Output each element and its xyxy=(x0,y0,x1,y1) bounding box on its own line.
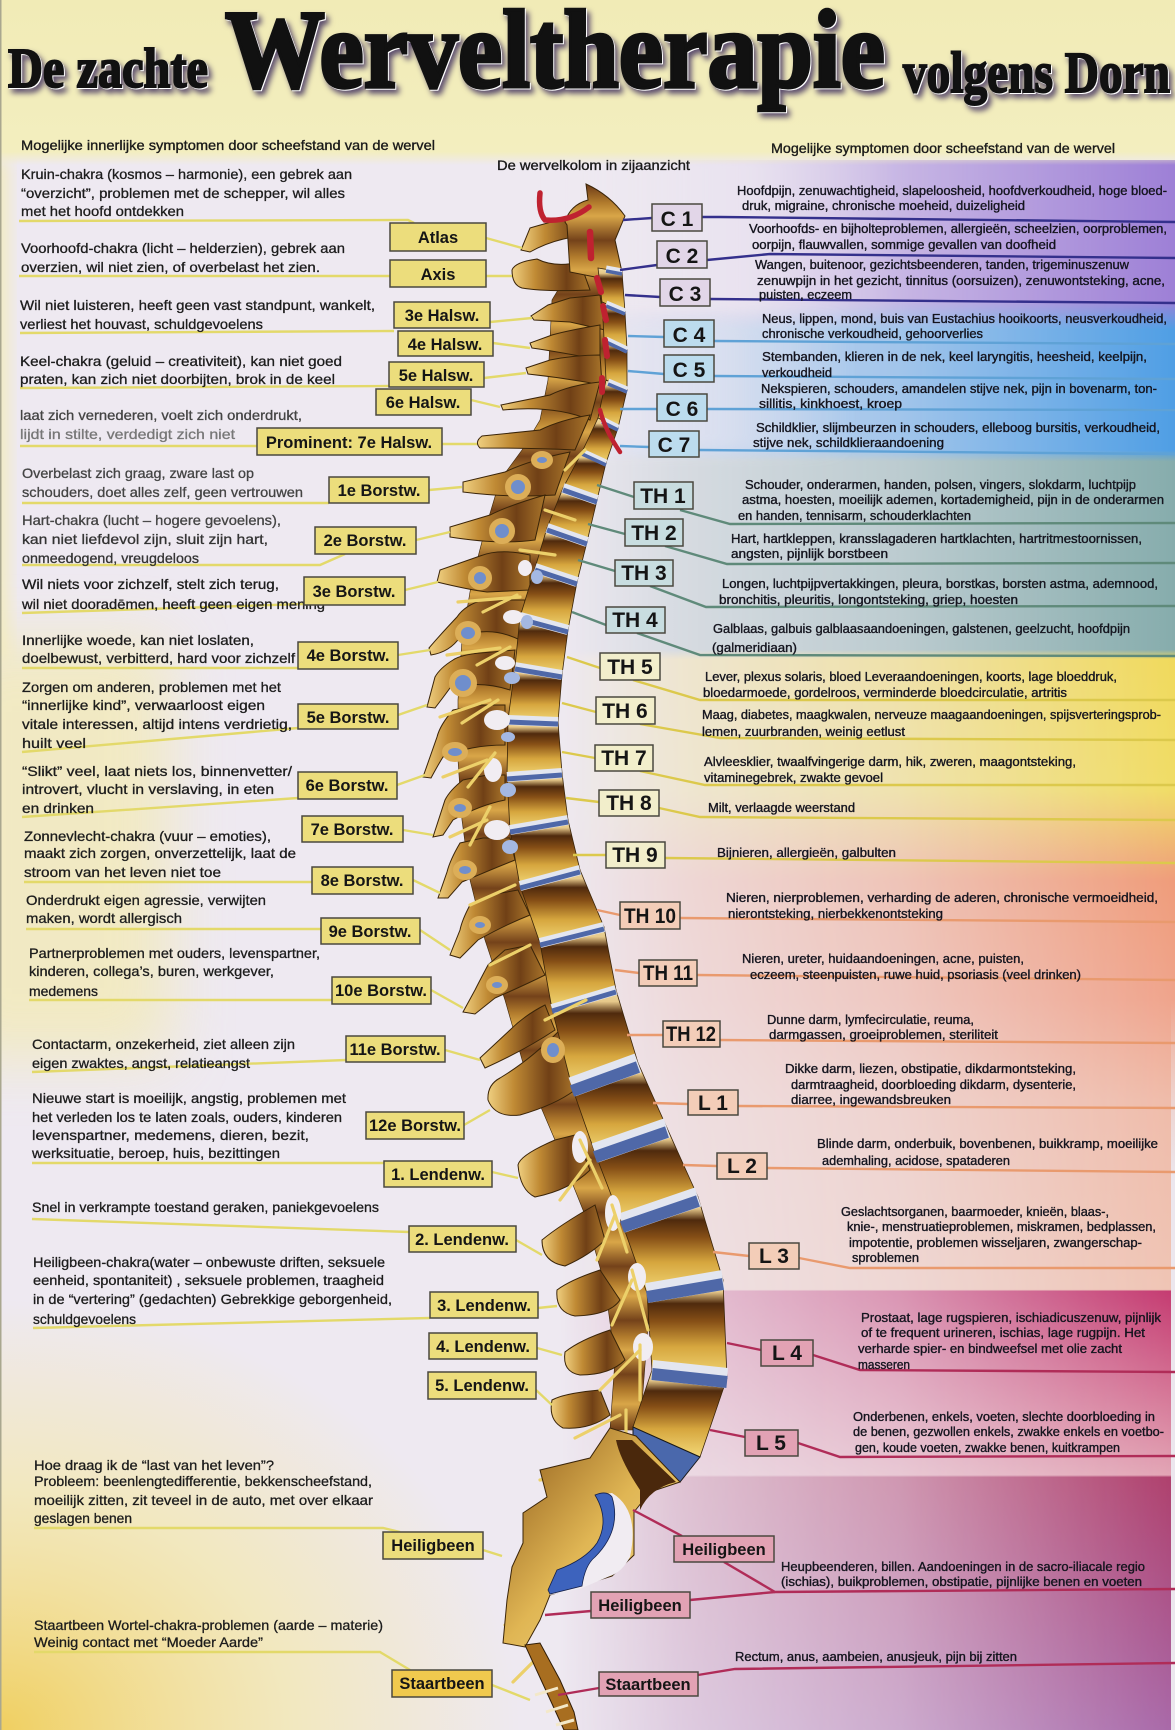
label: 5. Lendenw.: 5. Lendenw. xyxy=(435,1377,529,1395)
text: TH12 xyxy=(767,1013,999,1042)
label: 4. Lendenw. xyxy=(429,1333,537,1359)
text: 3e Borstw xyxy=(21,576,325,612)
text: C2: Voorhoofds- en bijholteproblemen, allergieën, scheelzien, oorproblemen, xyxy=(749,222,1167,236)
label: C 2 xyxy=(657,241,707,268)
label: L 4 xyxy=(761,1340,813,1366)
text: C5: verkoudheid xyxy=(762,366,832,380)
text: 3e Halsw: Wil niet luisteren, heeft geen vast standpunt, wankelt, xyxy=(20,297,375,313)
label: TH 6 xyxy=(596,697,655,724)
left column heading: Mogelijke innerlijke symptomen door scheefstand van de wervel xyxy=(21,137,435,153)
text: Atlas: Kruin-chakra (kosmos – harmonie), een gebrek aan xyxy=(21,166,352,182)
text: 3. Lendenw: eenheid, spontaniteit) , seksuele problemen, traagheid xyxy=(33,1272,384,1288)
text: L4: of te frequent urineren, ischias, lage rugpijn. Het xyxy=(861,1326,1146,1340)
right symptom texts xyxy=(702,184,1167,1664)
label: C 1: C 1 xyxy=(661,208,694,231)
label: 4e Halsw.: 4e Halsw. xyxy=(408,336,482,354)
label: TH 4 xyxy=(606,607,665,633)
label: L 1: L 1 xyxy=(698,1092,728,1115)
text: C3: Wangen, buitenoor, gezichtsbeenderen, tanden, trigeminuszenuw xyxy=(755,258,1130,272)
text: 1. Lendenw: het verleden los te laten zoals, ouders, kinderen xyxy=(32,1109,342,1125)
text: 1. Lendenw: levenspartner, medemens, dieren, bezit, xyxy=(32,1127,309,1143)
text: L2 xyxy=(817,1137,1158,1168)
label: C 6: C 6 xyxy=(666,398,698,421)
text: 3. Lendenw: schuldgevoelens xyxy=(33,1311,136,1327)
label: TH 5: TH 5 xyxy=(607,656,653,679)
spinous processes xyxy=(423,212,625,1428)
text: TH2 xyxy=(731,532,1142,561)
text: 8e Borstw: maakt zich zorgen, onverzettelijk, laat de xyxy=(24,845,296,861)
text: Axis: Voorhoofd-chakra (licht – helderzien), gebrek aan xyxy=(21,240,345,256)
text: TH1: astma, hoesten, moeilijk ademen, kortademigheid, pijn in de onderarmen xyxy=(742,493,1164,507)
text: TH5: bloedarmoede, gordelroos, verminderde bloedcirculatie, artritis xyxy=(703,686,1067,700)
text: 3e Halsw xyxy=(20,297,375,332)
text: 2e Borstw: Hart-chakra (lucht – hogere gevoelens), xyxy=(22,512,281,528)
label: TH 7: TH 7 xyxy=(601,747,647,770)
text: TH3 xyxy=(719,577,1158,607)
spinal nerves xyxy=(440,450,648,1682)
text: TH1: en handen, tennisarm, schouderklachten xyxy=(738,509,971,523)
label: TH 9 xyxy=(606,842,665,868)
text: C3 xyxy=(755,258,1165,302)
text: TH4 xyxy=(712,622,1130,655)
label: C 2: C 2 xyxy=(666,245,698,268)
label: 2e Borstw. xyxy=(315,527,416,554)
text: TH9: Bijnieren, allergieën, galbulten xyxy=(717,846,896,860)
text: L1: Dikke darm, liezen, obstipatie, dikdarmontsteking, xyxy=(785,1062,1076,1076)
intervertebral discs xyxy=(507,269,727,1482)
label: TH 3 xyxy=(615,560,673,586)
text: Staartbeen xyxy=(34,1617,383,1650)
text: 2e Borstw: kan niet liefdevol zijn, sluit zijn hart, xyxy=(22,531,268,547)
text: 8e Borstw: Zonnevlecht-chakra (vuur – emoties), xyxy=(24,828,271,844)
text: TH11: Nieren, ureter, huidaandoeningen, acne, puisten, xyxy=(742,952,1024,966)
text: C4 xyxy=(762,312,1167,341)
text: 5e Borstw xyxy=(22,679,292,751)
text: 3. Lendenw xyxy=(33,1254,392,1327)
text: 6e Borstw: introvert, vlucht in verslaving, in eten xyxy=(22,781,274,797)
label: C 7 xyxy=(649,431,699,457)
left vertebra labels xyxy=(257,223,538,1697)
text: L1 xyxy=(785,1062,1076,1107)
text: Heiligbeen xyxy=(34,1457,373,1526)
label: 2e Borstw.: 2e Borstw. xyxy=(324,532,406,550)
label: TH 3: TH 3 xyxy=(621,562,667,585)
blue facets on thoracic vertebrae xyxy=(445,454,562,1060)
text: L5: de benen, gezwollen enkels, zwakke enkels en voetbo- xyxy=(853,1425,1164,1439)
text: L2: Blinde darm, onderbuik, bovenbenen, buikkramp, moeilijke xyxy=(817,1137,1158,1151)
label: C 5 xyxy=(664,355,714,382)
text: 5e Halsw xyxy=(20,353,342,387)
label: Staartbeen: Staartbeen xyxy=(399,1675,485,1693)
text: TH5 xyxy=(703,670,1117,700)
label: TH 4: TH 4 xyxy=(612,609,658,632)
text: L2: ademhaling, acidose, spataderen xyxy=(822,1154,1010,1168)
text: Staartbeen: Rectum, anus, aambeien, anusjeuk, pijn bij zitten xyxy=(735,1650,1017,1664)
text: TH11: eczeem, steenpuisten, ruwe huid, psoriasis (veel drinken) xyxy=(750,968,1081,982)
label: Staartbeen xyxy=(599,1672,698,1696)
text: 7e Halsw xyxy=(20,407,302,442)
label: 3e Halsw. xyxy=(394,302,490,328)
label: C 3 xyxy=(660,279,710,306)
label: L 5: L 5 xyxy=(756,1432,786,1455)
text: 7e Halsw: laat zich vernederen, voelt zich onderdrukt, xyxy=(20,407,302,423)
text: TH10: nierontsteking, nierbekkenontsteking xyxy=(728,907,943,921)
label: 1. Lendenw.: 1. Lendenw. xyxy=(391,1166,485,1184)
label: L 3 xyxy=(749,1243,799,1269)
text: L4 xyxy=(858,1311,1162,1372)
text: Atlas: “overzicht”, problemen met de schepper, wil alles xyxy=(21,185,345,201)
text: 10e Borstw xyxy=(29,945,320,999)
text: C6: sillitis, kinkhoest, kroep xyxy=(759,397,902,411)
label: TH 1 xyxy=(634,482,693,509)
label: 3e Borstw. xyxy=(304,577,405,605)
right column heading: Mogelijke symptomen door scheefstand van de wervel xyxy=(771,140,1115,156)
centre heading: De wervelkolom in zijaanzicht xyxy=(497,157,690,173)
text: 6e Borstw: en drinken xyxy=(22,800,94,816)
text: C7 xyxy=(753,421,1160,450)
label: 5e Halsw.: 5e Halsw. xyxy=(399,367,473,385)
label: C 3: C 3 xyxy=(669,283,701,306)
text: L5: gen, koude voeten, zwakke benen, kuitkrampen xyxy=(855,1441,1120,1455)
text: C2: oorpijn, flauwvallen, sommige gevallen van doofheid xyxy=(752,238,1056,252)
label: 3. Lendenw. xyxy=(430,1292,538,1318)
label: Prominent: Prominent: 7e Halsw. xyxy=(266,434,432,452)
text: 5e Borstw: vitale interessen, altijd intens verdrietig, xyxy=(22,716,292,732)
text: 5e Halsw: Keel-chakra (geluid – creativiteit), kan niet goed xyxy=(20,353,342,369)
text: C4: chronische verkoudheid, gehoorverlies xyxy=(762,327,983,341)
label: TH 6: TH 6 xyxy=(602,700,648,723)
label: C 4: C 4 xyxy=(673,324,706,347)
text: Heiligbeen: (ischias), buikproblemen, obstipatie, pijnlijke benen en voeten xyxy=(781,1575,1142,1589)
label: TH 10: TH 10 xyxy=(624,905,676,928)
label: 5. Lendenw. xyxy=(428,1372,536,1399)
text: TH6 xyxy=(702,708,1161,739)
label: L 1 xyxy=(688,1090,738,1115)
text: TH4: (galmeridiaan) xyxy=(712,641,797,655)
text: TH7: vitaminegebrek, zwakte gevoel xyxy=(704,771,883,785)
label: 10e Borstw. xyxy=(332,977,431,1004)
text: Staartbeen: Weinig contact met “Moeder Aarde” xyxy=(34,1634,263,1650)
text: Atlas: met het hoofd ontdekken xyxy=(21,203,184,219)
text: Heiligbeen: Heupbeenderen, billen. Aandoeningen in de sacro-iliacale regio xyxy=(781,1560,1145,1574)
text: L3 xyxy=(841,1205,1156,1265)
text: 9e Borstw xyxy=(26,892,266,926)
label: L 4: L 4 xyxy=(772,1342,802,1365)
label: 11e Borstw.: 11e Borstw. xyxy=(349,1041,441,1059)
text: 3. Lendenw: in de “vertering” (gedachten) Gebrekkige geborgenheid, xyxy=(33,1291,392,1307)
label: Heiligbeen: Heiligbeen xyxy=(391,1537,475,1555)
text: 10e Borstw: Partnerproblemen met ouders, levenspartner, xyxy=(29,945,320,961)
text: 3. Lendenw: Heiligbeen-chakra(water – onbewuste driften, seksuele xyxy=(33,1254,385,1270)
text: L1: darmtraagheid, doorbloeding dikdarm, dysenterie, xyxy=(791,1078,1076,1092)
label: 7e Borstw. xyxy=(302,816,403,842)
text: L3: Geslachtsorganen, baarmoeder, knieën, blaas-, xyxy=(841,1205,1109,1219)
text: 1. Lendenw: Nieuwe start is moeilijk, angstig, problemen met xyxy=(32,1090,346,1106)
label: 1e Borstw.: 1e Borstw. xyxy=(338,482,420,500)
text: 1. Lendenw xyxy=(31,1090,346,1161)
label: 1. Lendenw. xyxy=(384,1161,492,1187)
text: 10e Borstw: medemens xyxy=(29,983,98,999)
atlas and axis head xyxy=(565,184,625,278)
text: 7e Halsw: lijdt in stilte, verdedigt zich niet xyxy=(20,426,235,442)
small rib facets xyxy=(500,570,543,854)
label: 6e Halsw. xyxy=(376,389,471,415)
text: Heiligbeen xyxy=(781,1560,1145,1589)
text: 8e Borstw: stroom van het leven niet toe xyxy=(24,864,221,880)
neural arch mass behind the vertebrae xyxy=(458,220,650,1430)
text: C4: Neus, lippen, mond, buis van Eustachius hooikoorts, neusverkoudheid, xyxy=(762,312,1167,326)
text: TH6: lemen, zuurbranden, weinig eetlust xyxy=(702,725,906,739)
label: L 2: L 2 xyxy=(727,1155,757,1178)
label: 2. Lendenw.: 2. Lendenw. xyxy=(415,1231,509,1249)
label: C 1 xyxy=(652,204,702,231)
label: 5e Borstw.: 5e Borstw. xyxy=(307,709,389,727)
coccyx xyxy=(525,1643,578,1730)
label: Staartbeen xyxy=(392,1670,492,1697)
text: TH8: Milt, verlaagde weerstand xyxy=(708,801,855,815)
label: Heiligbeen lower: Heiligbeen xyxy=(598,1597,682,1615)
text: L3: sproblemen xyxy=(852,1251,919,1265)
label: Heiligbeen xyxy=(383,1532,483,1559)
text: C1 xyxy=(737,184,1167,213)
text: 3e Halsw: verliest het houvast, schuldgevoelens xyxy=(20,316,263,332)
label: TH 9: TH 9 xyxy=(612,844,658,867)
text: C3: zenuwpijn in het gezicht, tinnitus (oorsuizen), zenuwontsteking, acne, xyxy=(757,274,1165,288)
label: 9e Borstw. xyxy=(321,918,420,944)
text: 1e Borstw: Overbelast zich graag, zware last op xyxy=(22,465,254,481)
right vertebra labels xyxy=(591,204,813,1696)
label: 5e Halsw. xyxy=(389,362,484,387)
label: 12e Borstw. xyxy=(366,1112,464,1139)
label: 3e Borstw.: 3e Borstw. xyxy=(313,583,395,601)
label: Heiligbeen lower xyxy=(591,1592,690,1618)
title: De zachte xyxy=(8,38,208,100)
label: 4e Halsw. xyxy=(398,331,493,356)
text: 4e Borstw: doelbewust, verbitterd, hard voor zichzelf xyxy=(22,650,295,666)
sacrum xyxy=(503,1428,680,1647)
label: Heiligbeen upper xyxy=(674,1536,774,1562)
text: Heiligbeen: moeilijk zitten, zit teveel in de auto, met over elkaar xyxy=(34,1492,373,1508)
label: 7e Borstw.: 7e Borstw. xyxy=(311,821,393,839)
text: 3e Borstw: wil niet dooradēmen, heeft geen eigen mening xyxy=(21,596,325,612)
label: C 6 xyxy=(657,394,707,421)
left connector lines xyxy=(19,220,562,1700)
text: 5e Borstw: Zorgen om anderen, problemen met het xyxy=(22,679,281,695)
label: C 4 xyxy=(664,320,714,347)
label: 6e Borstw.: 6e Borstw. xyxy=(306,777,388,795)
label: L 2 xyxy=(717,1153,767,1179)
text: 2e Borstw xyxy=(22,512,281,566)
text: TH4: Galblaas, galbuis galblaasaandoeningen, galstenen, geelzucht, hoofdpijn xyxy=(713,622,1130,636)
label: TH 8 xyxy=(599,790,659,816)
label: Axis: Axis xyxy=(421,266,455,284)
text: TH12: Dunne darm, lymfecirculatie, reuma, xyxy=(767,1013,974,1027)
label: 3e Halsw.: 3e Halsw. xyxy=(405,307,479,325)
label: 4e Borstw.: 4e Borstw. xyxy=(307,647,389,665)
text: Atlas xyxy=(21,166,352,219)
label: TH 8: TH 8 xyxy=(606,792,652,815)
text: 8e Borstw xyxy=(24,828,296,880)
text: 4e Borstw xyxy=(22,632,295,666)
label: TH 11: TH 11 xyxy=(643,962,693,985)
text: TH3: Longen, luchtpijpvertakkingen, pleura, borstkas, borsten astma, ademnood, xyxy=(722,577,1158,591)
label: L 5 xyxy=(745,1430,798,1456)
text: C7: stijve nek, schildklieraandoening xyxy=(753,436,944,450)
text: TH1 xyxy=(738,478,1164,523)
vertebral artery xyxy=(540,193,620,452)
label: Atlas: Atlas xyxy=(418,229,458,247)
text: L3: impotentie, problemen wisseljaren, zwangerschap- xyxy=(849,1236,1142,1250)
text: 2e Borstw: onmeedogend, vreugdeloos xyxy=(22,550,199,566)
text: TH7 xyxy=(704,755,1076,785)
label: Heiligbeen upper: Heiligbeen xyxy=(682,1541,766,1559)
label: TH 7 xyxy=(595,745,653,771)
text: 1e Borstw xyxy=(22,465,303,500)
text: 9e Borstw: maken, wordt allergisch xyxy=(26,910,182,926)
text: TH2: angsten, pijnlijk borstbeen xyxy=(731,547,888,561)
label: Staartbeen: Staartbeen xyxy=(605,1676,691,1694)
label: TH 2: TH 2 xyxy=(631,522,677,545)
label: 1e Borstw. xyxy=(329,477,429,503)
text: L5 xyxy=(853,1410,1164,1455)
text: Heiligbeen: Probleem: beenlengtedifferentie, bekkenscheefstand, xyxy=(34,1473,372,1489)
label: Axis xyxy=(390,260,486,287)
text: Staartbeen: Staartbeen Wortel-chakra-problemen (aarde – materie) xyxy=(34,1617,383,1633)
label: 5e Borstw. xyxy=(298,704,398,729)
text: 6e Borstw: “Slikt” veel, laat niets los, binnenvetter/ xyxy=(22,763,292,779)
text: 5e Borstw: huilt veel xyxy=(22,735,86,751)
text: L4: masseren xyxy=(858,1358,910,1372)
text: TH11 xyxy=(742,952,1081,982)
label: TH 5 xyxy=(600,653,660,680)
text: 11e Borstw xyxy=(32,1036,295,1071)
text: 5e Halsw: praten, kan zich niet doorbijten, brok in de keel xyxy=(20,371,335,387)
label: 11e Borstw. xyxy=(346,1036,445,1062)
text: L1: diarree, ingewandsbreuken xyxy=(791,1093,951,1107)
label: 4e Borstw. xyxy=(298,642,398,669)
right connector lines xyxy=(545,217,1175,1695)
text: C6: Nekspieren, schouders, amandelen stijve nek, pijn in bovenarm, ton- xyxy=(761,382,1157,396)
text: 1. Lendenw: werksituatie, beroep, huis, bezittingen xyxy=(31,1145,280,1161)
label: TH 2 xyxy=(625,519,683,546)
label: 9e Borstw.: 9e Borstw. xyxy=(329,923,411,941)
label: 10e Borstw.: 10e Borstw. xyxy=(335,982,427,1000)
gaps between arches xyxy=(484,560,653,1361)
text: Heiligbeen: geslagen benen xyxy=(34,1510,132,1526)
text: Axis xyxy=(21,240,345,275)
text: C7: Schildklier, slijmbeurzen in schouders, elleboog bursitis, verkoudheid, xyxy=(756,421,1160,435)
text: TH7: Alvleesklier, twaalfvingerige darm, hik, zweren, maagontsteking, xyxy=(704,755,1076,769)
text: TH5: Lever, plexus solaris, bloed Leveraandoeningen, koorts, lage bloeddruk, xyxy=(705,670,1117,684)
text: Axis: overzien, wil niet zien, of overbelast het zien. xyxy=(21,259,320,275)
text: TH3: bronchitis, pleuritis, longontsteking, griep, hoesten xyxy=(719,593,1018,607)
label: 4. Lendenw.: 4. Lendenw. xyxy=(436,1338,530,1356)
text: TH2: Hart, hartkleppen, kransslagaderen hartklachten, hartritmestoornissen, xyxy=(731,532,1142,546)
vertebral bodies xyxy=(507,268,727,1457)
label: C 5: C 5 xyxy=(673,359,706,382)
text: 10e Borstw: kinderen, collega’s, buren, werkgever, xyxy=(29,963,274,979)
text: L5: Onderbenen, enkels, voeten, slechte doorbloeding in xyxy=(853,1410,1155,1424)
label: TH 1: TH 1 xyxy=(640,485,686,508)
text: 11e Borstw: Contactarm, onzekerheid, ziet alleen zijn xyxy=(32,1036,295,1052)
text: 9e Borstw: Onderdrukt eigen agressie, verwijten xyxy=(26,892,266,908)
text: 3e Borstw: Wil niets voor zichzelf, stelt zich terug, xyxy=(22,576,279,592)
text: L3: knie-, menstruatieproblemen, miskramen, bedplassen, xyxy=(847,1220,1156,1234)
spine illustration xyxy=(423,184,727,1730)
label: 3. Lendenw.: 3. Lendenw. xyxy=(437,1297,531,1315)
label: Atlas xyxy=(390,223,486,251)
text: TH10 xyxy=(726,891,1158,921)
text: L4: verharde spier- en bindweefsel met olie zacht xyxy=(858,1342,1123,1356)
text: C6 xyxy=(759,382,1157,411)
text: Heiligbeen: Hoe draag ik de “last van het leven”? xyxy=(34,1457,274,1473)
label: 8e Borstw.: 8e Borstw. xyxy=(321,872,403,890)
text: 2. Lendenw: Snel in verkrampte toestand geraken, paniekgevoelens xyxy=(32,1199,379,1215)
title xyxy=(8,0,1170,112)
label: 8e Borstw. xyxy=(312,867,413,894)
text: 5e Borstw: “innerlijke kind”, verwaarloost eigen xyxy=(22,697,265,713)
label: 2. Lendenw. xyxy=(409,1226,516,1252)
text: 1e Borstw: schouders, doet alles zelf, geen vertrouwen xyxy=(22,484,303,500)
text: TH12: darmgassen, groeiproblemen, steriliteit xyxy=(769,1028,999,1042)
text: C2 xyxy=(749,222,1167,252)
text: 4e Borstw: Innerlijke woede, kan niet loslaten, xyxy=(22,632,254,648)
text: L4: Prostaat, lage rugspieren, ischiadicuszenuw, pijnlijk xyxy=(861,1311,1162,1325)
text: 6e Borstw xyxy=(22,763,292,816)
label: C 7: C 7 xyxy=(658,434,690,457)
left symptom texts xyxy=(20,166,392,1650)
label: 6e Borstw. xyxy=(298,772,397,799)
label: L 3: L 3 xyxy=(759,1245,789,1268)
label: Prominent xyxy=(257,428,442,455)
text: TH1: Schouder, onderarmen, handen, polsen, vingers, slokdarm, luchtpijp xyxy=(745,478,1136,492)
text: C5 xyxy=(762,350,1147,380)
text: C1: druk, migraine, chronische moeheid, duizeligheid xyxy=(742,199,1025,213)
text: TH6: Maag, diabetes, maagkwalen, nerveuze maagaandoeningen, spijsverteringsprob- xyxy=(702,708,1161,722)
text: C5: Stembanden, klieren in de nek, keel laryngitis, heesheid, keelpijn, xyxy=(762,350,1147,364)
text: TH10: Nieren, nierproblemen, verharding de aderen, chronische vermoeidheid, xyxy=(726,891,1158,905)
text: C3: puisten, eczeem xyxy=(759,288,852,302)
label: 12e Borstw.: 12e Borstw. xyxy=(369,1117,461,1135)
text: C1: Hoofdpijn, zenuwachtigheid, slapeloosheid, hoofdverkoudheid, hoge bloed- xyxy=(737,184,1167,198)
label: TH 12: TH 12 xyxy=(666,1023,716,1046)
text: 11e Borstw: eigen zwaktes, angst, relatieangst xyxy=(32,1055,250,1071)
label: 6e Halsw.: 6e Halsw. xyxy=(386,394,460,412)
